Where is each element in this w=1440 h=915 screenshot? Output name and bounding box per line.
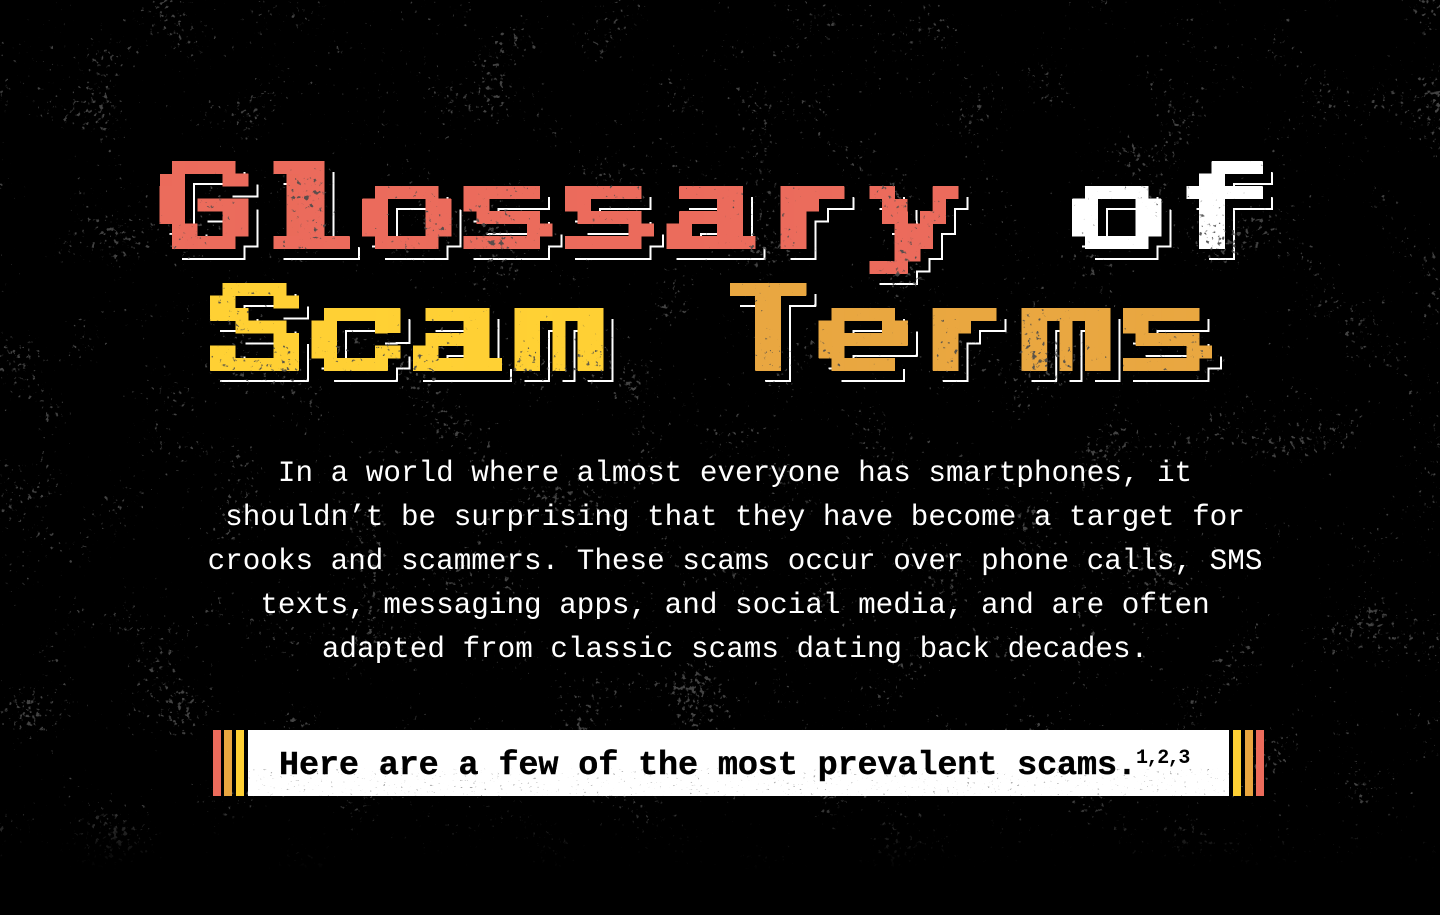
title word: of: f: [1175, 151, 1273, 284]
title word: of: o: [1066, 151, 1164, 284]
title word: Scam: S: [203, 261, 306, 411]
title word: Scam: c: [304, 273, 410, 407]
left stripes: [213, 730, 244, 796]
title word: Glossary: y: [865, 151, 963, 284]
title word: Glossary: o: [358, 151, 456, 284]
intro paragraph: texts, messaging apps, and social media, and are often: [260, 589, 1210, 622]
banner background: [248, 730, 1229, 796]
banner grain: [248, 768, 1229, 796]
intro paragraph: adapted from classic scams dating back decades.: [322, 633, 1148, 666]
title word: Terms: [730, 283, 1222, 382]
title word: Glossary: s: [446, 151, 560, 284]
title word: Glossary: G: [158, 139, 250, 289]
intro paragraph: shouldn’t be surprising that they have become a target for: [225, 501, 1245, 534]
title word: Glossary: r: [773, 142, 843, 274]
title word: Scam: a: [409, 273, 506, 406]
banner panel: [213, 730, 1264, 796]
title word: Glossary: [160, 161, 968, 285]
title word: Terms: T: [729, 260, 805, 410]
title word: Terms: r: [925, 264, 995, 396]
title word: Terms: m: [1017, 273, 1115, 406]
bottom fade of grain: [0, 796, 1440, 870]
title word: Scam: m: [510, 273, 608, 406]
intro paragraph: crooks and scammers. These scams occur over phone calls, SMS: [208, 545, 1262, 578]
title word: Terms: s: [1105, 273, 1219, 406]
banner text: Here are a few of the most prevalent scams.: [279, 747, 1137, 785]
title word: of: [1072, 161, 1273, 260]
title word: Glossary: s: [548, 151, 662, 284]
title word: Scam: [210, 283, 614, 382]
intro paragraph: [208, 457, 1262, 666]
title word: Glossary: a: [662, 151, 760, 284]
intro paragraph: In a world where almost everyone has smartphones, it: [278, 457, 1192, 490]
title word: Terms: e: [814, 273, 912, 406]
title: [160, 161, 1273, 382]
right stripes: [1233, 730, 1264, 796]
superscript references: 1,2,3: [1136, 747, 1189, 770]
title word: Glossary: l: [274, 140, 348, 275]
